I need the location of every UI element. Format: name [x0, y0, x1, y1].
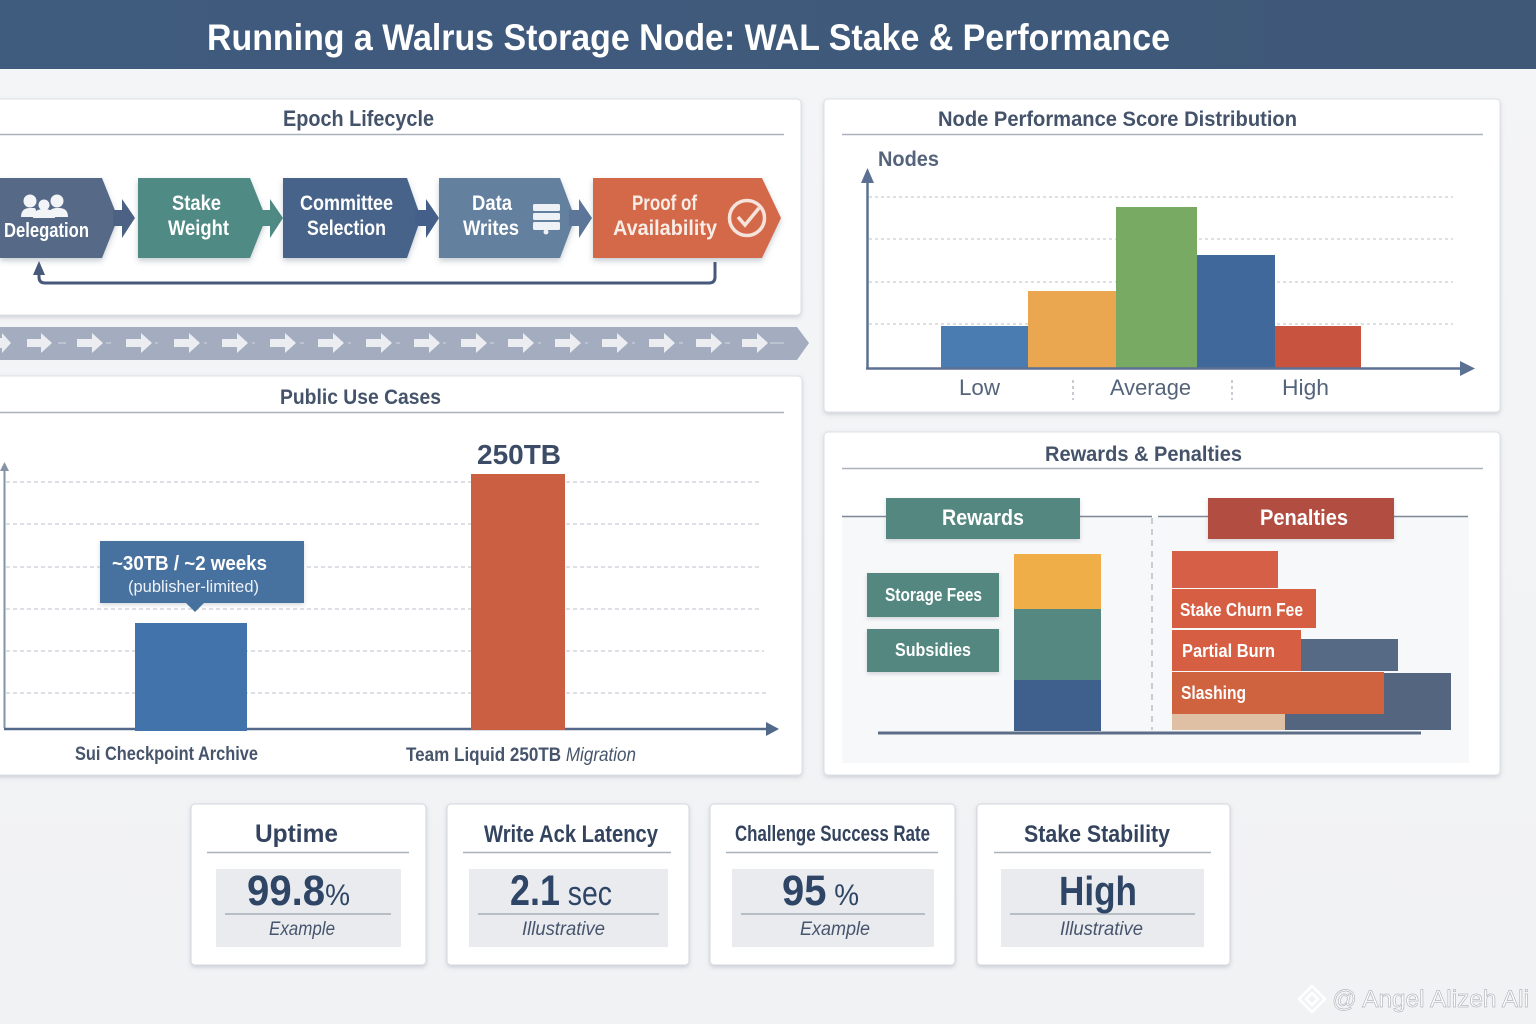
step: data writes	[439, 178, 592, 258]
step: committee selection: Committee	[300, 192, 393, 215]
bar: average	[1116, 207, 1197, 368]
callout: publisher limited	[100, 541, 304, 612]
step: data writes: Data	[472, 192, 512, 215]
KPI card: uptime: Example	[269, 919, 335, 940]
KPI card: write ack latency: Illustrative	[522, 919, 605, 940]
value: 95%: 95 %	[782, 867, 859, 915]
header: penalties	[1208, 498, 1394, 539]
title banner: Running a Walrus Storage Node: WAL Stake & Performance	[207, 17, 1170, 58]
header: penalties: Penalties	[1260, 505, 1348, 530]
heading: public use cases: Public Use Cases	[280, 386, 441, 409]
callout: publisher limited: ~30TB / ~2 weeks	[112, 553, 267, 575]
title banner	[0, 0, 1536, 69]
bar: partial burn: Partial Burn	[1182, 641, 1275, 661]
KPI card: challenge success rate: Example	[800, 919, 870, 940]
KPI card: write ack latency	[447, 804, 689, 965]
panel: public use cases	[0, 376, 802, 775]
step: committee selection	[283, 178, 439, 258]
step: proof of availability: Proof of	[632, 192, 698, 215]
bar: above average	[1197, 255, 1275, 368]
bar: stake churn fee	[1172, 589, 1316, 628]
bar: low-mid	[1028, 291, 1116, 368]
step: stake weight	[138, 178, 283, 258]
KPI card: write ack latency: Write Ack Latency	[484, 821, 659, 848]
histogram: Nodes	[878, 148, 939, 171]
histogram	[861, 148, 1475, 400]
stacked bars: penalties	[1172, 551, 1451, 730]
label: storage fees	[867, 573, 999, 617]
bar chart: use cases	[0, 439, 779, 766]
value: 250TB: 250TB	[477, 439, 561, 470]
panel: node performance score distribution	[824, 99, 1500, 412]
callout: publisher limited: (publisher-limited)	[128, 578, 259, 596]
heading: rewards and penalties: Rewards & Penalties	[1045, 442, 1242, 466]
bar: stake churn fee: Stake Churn Fee	[1180, 600, 1303, 620]
icon: database	[533, 204, 560, 234]
label: team liquid migration: Team Liquid 250TB Migration	[406, 745, 636, 766]
label: subsidies: Subsidies	[895, 640, 971, 660]
stacked bar: rewards	[1014, 554, 1101, 731]
panel: rewards and penalties	[824, 432, 1500, 775]
bar: sui checkpoint archive	[135, 623, 247, 731]
KPI card: stake stability: Illustrative	[1060, 919, 1143, 940]
label: storage fees: Storage Fees	[885, 585, 982, 605]
bar: partial burn	[1172, 630, 1301, 671]
KPI card: uptime: Uptime	[255, 820, 338, 848]
step: data writes: Writes	[463, 217, 519, 240]
histogram: High	[1282, 375, 1329, 400]
histogram: Average	[1110, 375, 1191, 400]
KPI card: challenge success rate: Challenge Success Rate	[735, 821, 930, 846]
watermark: @ Angel Alizeh Ali	[1332, 986, 1529, 1013]
histogram: Low	[959, 375, 1000, 400]
KPI card: uptime	[191, 804, 426, 965]
bar: high	[1275, 326, 1361, 368]
arrow: feedback loop	[33, 261, 715, 283]
label: sui checkpoint archive: Sui Checkpoint Archive	[75, 744, 258, 765]
KPI card: challenge success rate	[710, 804, 955, 965]
step: delegation: Delegation	[4, 220, 89, 242]
bar: team liquid migration	[471, 474, 565, 730]
value: 99.8%: 99.8%	[247, 867, 350, 915]
step: stake weight: Stake	[172, 192, 221, 215]
heading: epoch lifecycle: Epoch Lifecycle	[283, 106, 434, 131]
value: 2.1 sec: 2.1 sec	[510, 867, 612, 915]
KPI card: stake stability: Stake Stability	[1024, 821, 1171, 848]
heading: node performance: Node Performance Score Distribution	[938, 107, 1297, 131]
icon: people	[21, 194, 68, 218]
header: rewards: Rewards	[942, 505, 1024, 530]
header: rewards	[886, 498, 1080, 539]
timeline arrow band	[0, 327, 809, 360]
KPI card: stake stability	[977, 804, 1230, 965]
step: delegation	[0, 178, 135, 258]
step: stake weight: Weight	[168, 217, 229, 240]
step: committee selection: Selection	[307, 217, 386, 240]
bar: low	[941, 326, 1028, 368]
value: high: High	[1059, 868, 1137, 914]
panel: epoch lifecycle	[0, 99, 801, 315]
label: subsidies	[867, 629, 999, 672]
bar: slashing	[1172, 672, 1384, 714]
step: proof of availability	[593, 178, 781, 258]
step: proof of availability: Availability	[613, 217, 717, 240]
icon: checkmark circle	[730, 200, 764, 236]
bar: slashing: Slashing	[1181, 683, 1246, 703]
